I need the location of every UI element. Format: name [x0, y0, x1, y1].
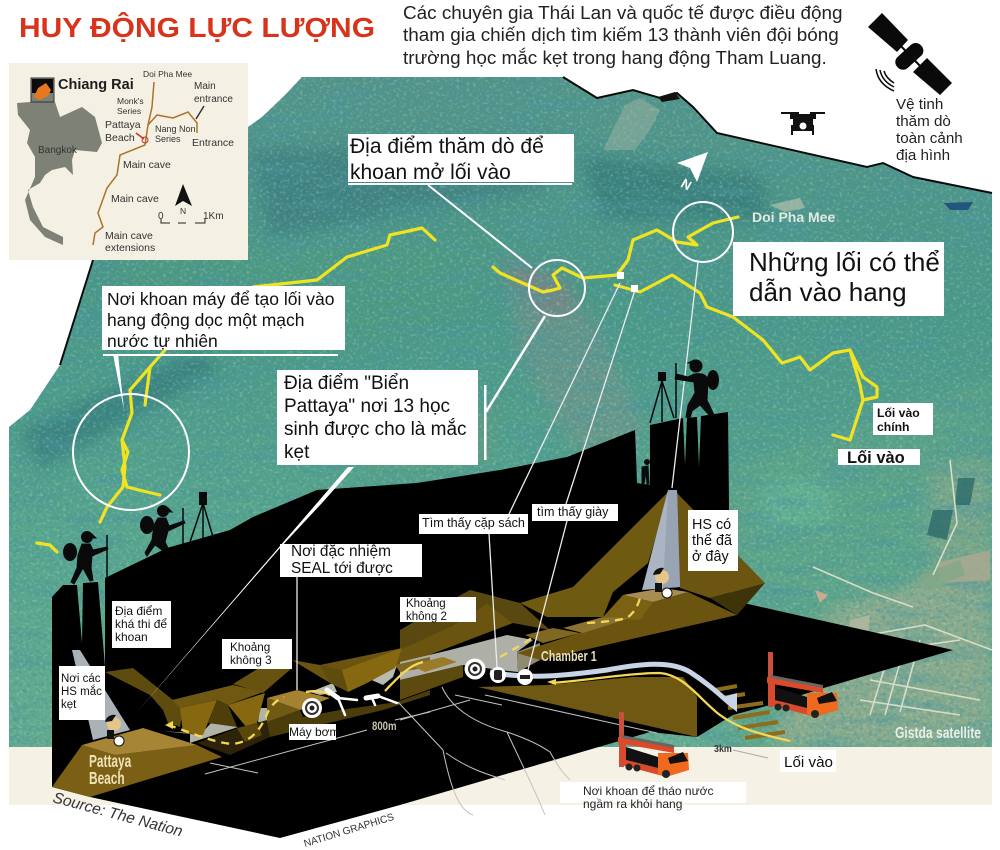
Chiang Rai inset	[31, 78, 54, 102]
map labels: N	[180, 206, 186, 216]
stalactites	[180, 648, 430, 735]
label: 3km: 3km	[714, 743, 732, 755]
map labels: entrance	[194, 94, 233, 105]
farmland and roads	[813, 460, 992, 715]
label: Khoảng không 3: không 3	[230, 654, 272, 667]
label: main entrance: chính	[877, 420, 910, 434]
label: bag found	[419, 514, 528, 534]
label: drainage drilling	[560, 782, 746, 811]
label: main entrance	[873, 403, 933, 435]
map labels: 0	[158, 211, 164, 222]
label: Chamber 1: Chamber 1	[541, 647, 597, 664]
map labels: Series	[155, 134, 181, 144]
label: Khoảng không 2	[400, 597, 476, 623]
label: stuck students: HS mắc	[61, 685, 102, 698]
icon: drone	[781, 112, 825, 135]
Pattaya Beach platform	[52, 728, 222, 797]
label: Khoảng không 3	[222, 639, 292, 669]
label: Doi Pha Mee: Doi Pha Mee	[752, 209, 835, 225]
Pattaya Beach platform: Pattaya	[89, 752, 132, 772]
map labels: Pattaya	[105, 119, 141, 131]
mountain rock face	[603, 98, 660, 150]
label: possible drill site	[112, 601, 171, 648]
terrain satellite image	[0, 70, 1000, 750]
light shaft left	[72, 650, 130, 740]
label: shoes found	[532, 504, 618, 521]
compass arrow	[677, 152, 708, 193]
cave ceilings	[105, 490, 765, 727]
label: entrance: Lối vào	[847, 449, 905, 467]
label: entrance bottom	[780, 750, 836, 772]
callout: drill along stream: Nơi khoan máy để tạo lối vào	[107, 289, 334, 309]
map labels: Monk's	[117, 96, 144, 106]
ridge outline	[563, 77, 992, 193]
callout: Pattaya beach	[277, 370, 478, 465]
intro text	[403, 3, 843, 69]
divers	[327, 690, 397, 715]
map labels: Nang Non	[155, 124, 196, 134]
map labels: extensions	[105, 242, 155, 254]
hikers left with tripod	[63, 492, 213, 584]
map panel	[9, 63, 248, 260]
label: students may have been here	[688, 510, 738, 571]
north arrow	[175, 184, 192, 206]
label: possible drill site: Địa điểm	[115, 604, 162, 618]
callout: drilling exploration site: khoan mở lối vào	[350, 161, 511, 184]
cave route on map	[93, 82, 204, 245]
label: entrance bottom: Lối vào	[784, 754, 833, 771]
map labels: Doi Pha Mee	[143, 69, 192, 79]
map labels: Beach	[105, 132, 135, 144]
map labels: Chiang Rai	[58, 77, 134, 93]
label: pump: Máy bơm	[289, 725, 340, 739]
truck left	[618, 712, 689, 778]
scale bar	[161, 219, 205, 223]
label: students may have been here: thể đã	[692, 533, 732, 549]
callout: drill along stream	[102, 286, 345, 356]
callout: Pattaya beach: kẹt	[284, 442, 310, 463]
map labels: Bangkok	[38, 145, 78, 156]
label: main entrance: Lối vào	[877, 406, 920, 420]
yellow cave route paths	[37, 217, 877, 552]
label: stuck students: Nơi các	[61, 673, 101, 685]
label: Khoảng không 2: không 2	[406, 611, 447, 623]
callout: drilling exploration site	[348, 134, 574, 185]
callout: SEAL reached: SEAL tới được	[291, 560, 393, 577]
callout: Pattaya beach: sinh được cho là mắc	[284, 418, 467, 440]
Thailand silhouette	[17, 102, 102, 245]
light shaft right	[642, 490, 680, 590]
truck right	[767, 652, 838, 718]
callout: possible entrances: Những lối có thể	[749, 247, 940, 277]
map labels: Main cave	[111, 193, 159, 205]
callout: Pattaya beach: Pattaya" nơi 13 học	[284, 396, 450, 417]
source credit: Source: The Nation	[51, 789, 184, 840]
intro text: trường học mắc kẹt trong hang động Tham Luang.	[403, 47, 827, 69]
label: bag found: Tìm thấy cặp sách	[422, 516, 525, 530]
label: 3km	[714, 743, 768, 758]
callout: SEAL reached	[280, 543, 422, 577]
callout: possible entrances: dẫn vào hang	[749, 277, 907, 307]
label: drainage drilling: ngầm ra khỏi hang	[583, 797, 682, 811]
water flow arrow	[490, 664, 737, 712]
label: drainage drilling: Nơi khoan để tháo nước	[583, 784, 714, 798]
map labels: 1Km	[203, 211, 224, 222]
callout: drill along stream: nước tự nhiên	[107, 331, 218, 351]
compass arrow: N	[678, 176, 694, 193]
graphics credit: NATION GRAPHICS	[303, 812, 396, 850]
intro text: tham gia chiến dịch tìm kiếm 13 thành viên đội bóng	[403, 25, 839, 46]
lower floor sections	[197, 657, 463, 755]
label: stuck students: kẹt	[61, 699, 77, 711]
satellite label: Vệ tinh	[896, 96, 943, 113]
callout: drilling exploration site: Địa điểm thăm dò để	[350, 135, 544, 158]
callout: possible entrances	[733, 242, 944, 316]
pump and found items icons	[302, 658, 533, 718]
callout: SEAL reached: Nơi đặc nhiệm	[291, 543, 391, 560]
beige ground strip	[9, 747, 992, 805]
Pattaya Beach platform: Beach	[89, 769, 125, 789]
label: possible drill site: khá thi để	[115, 617, 167, 631]
title: HUY ĐỘNG LỰC LƯỢNG	[19, 11, 375, 43]
label: shoes found: tìm thấy giày	[537, 505, 609, 519]
label: stuck students	[59, 666, 105, 720]
grey cave floor	[162, 635, 540, 743]
label: students may have been here: ở đây	[692, 549, 729, 565]
yellow dashed route	[165, 598, 790, 744]
satellite label: toàn cảnh	[896, 130, 963, 147]
trapped children icons	[105, 568, 672, 746]
black cave cross-section block	[52, 412, 953, 838]
thin lines in lower block	[205, 687, 657, 815]
map labels: Main	[194, 81, 216, 92]
label: students may have been here: HS có	[692, 517, 731, 533]
label: 800m: 800m	[372, 720, 397, 733]
satellite label: thăm dò	[896, 113, 951, 130]
map labels	[38, 69, 234, 254]
map labels: Series	[117, 106, 141, 116]
hiker right with tripod	[642, 360, 719, 484]
Pattaya Beach marker	[142, 137, 148, 143]
drill pointer lines	[137, 262, 698, 712]
right platform and long slab	[478, 588, 737, 737]
satellite label	[896, 96, 963, 164]
label: possible drill site: khoan	[115, 630, 148, 644]
label pointer lines on terrain	[113, 185, 545, 460]
icon: satellite	[868, 13, 952, 95]
callout: drill along stream: hang động dọc một mạch	[107, 310, 304, 330]
label: Khoảng không 2: Khoảng	[406, 598, 446, 610]
intro text: Các chuyên gia Thái Lan và quốc tế được điều động	[403, 3, 843, 24]
map labels: Main cave	[105, 230, 153, 242]
map labels: Main cave	[123, 159, 171, 171]
label: Khoảng không 3: Khoảng	[230, 641, 270, 654]
stairs at cave entrance	[715, 686, 785, 738]
pond	[944, 202, 973, 210]
satellite label: địa hình	[896, 147, 950, 164]
callout: Pattaya beach: Địa điểm "Biển	[284, 373, 409, 394]
survey circles	[73, 202, 733, 510]
map labels: Entrance	[192, 137, 234, 149]
